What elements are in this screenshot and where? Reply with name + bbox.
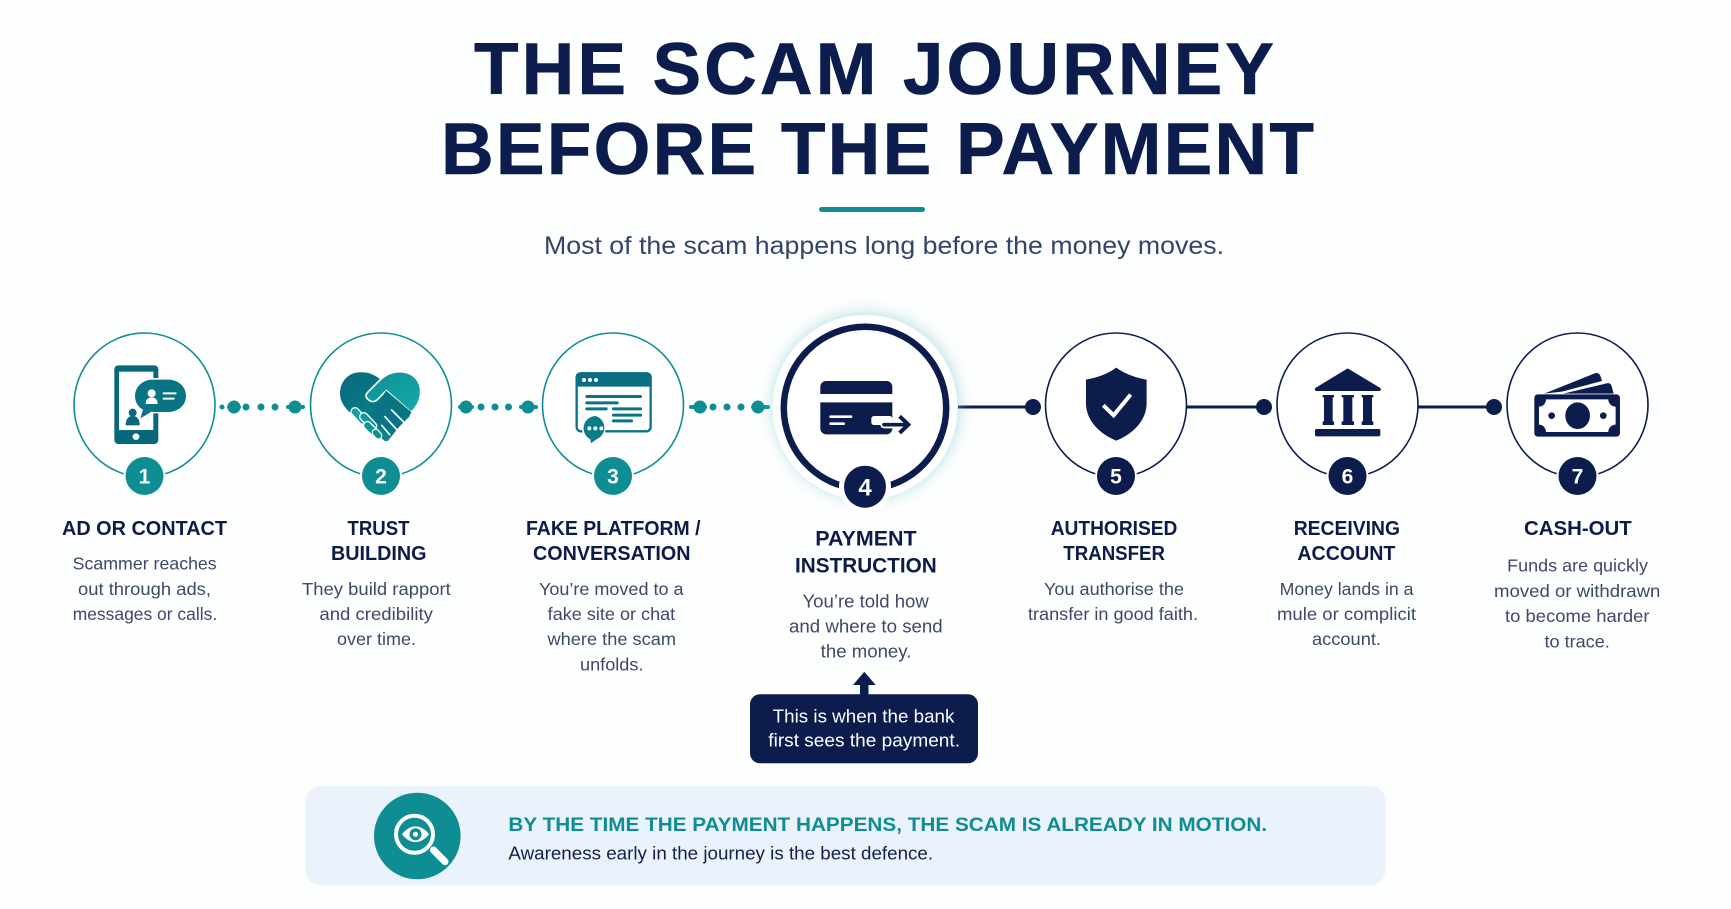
step 3 description: where the scam bbox=[546, 629, 676, 649]
connector: step 2 to 3 bbox=[458, 400, 538, 414]
icon: shield with check bbox=[1086, 368, 1147, 441]
step 2 circle bbox=[310, 333, 452, 477]
step 1 description: messages or calls. bbox=[73, 604, 217, 624]
step 3 description: unfolds. bbox=[580, 654, 644, 674]
step 5 heading: AUTHORISED bbox=[1051, 517, 1177, 540]
step 2 description: over time. bbox=[337, 629, 416, 649]
step 1: ad or contact bbox=[62, 333, 227, 624]
step 2: trust building bbox=[302, 333, 452, 649]
step 7 description: to trace. bbox=[1544, 632, 1610, 652]
badge 5: 5 bbox=[1110, 466, 1122, 488]
banner background bbox=[306, 786, 1386, 885]
step 6: receiving account bbox=[1277, 333, 1418, 649]
step 5 description bbox=[1028, 579, 1198, 624]
step 6 heading: ACCOUNT bbox=[1297, 542, 1396, 565]
step 6 description: mule or complicit bbox=[1277, 604, 1416, 624]
banner subtext: Awareness early in the journey is the best defence. bbox=[508, 843, 933, 863]
step 2 description: and credibility bbox=[319, 604, 433, 624]
step 4 heading bbox=[795, 527, 937, 577]
connector: step 3 to 4 bbox=[689, 400, 770, 414]
badge 3: 3 bbox=[607, 466, 619, 488]
step 4 glow halo bbox=[772, 312, 960, 500]
subtitle: Most of the scam happens long before the money moves. bbox=[544, 232, 1224, 260]
step 7 description bbox=[1494, 556, 1660, 652]
badge 4: 4 bbox=[858, 474, 872, 502]
step 4 white halo bbox=[772, 315, 958, 500]
callout: bank first sees payment bbox=[750, 694, 978, 763]
step 5 description: You authorise the bbox=[1044, 579, 1184, 599]
step 7 description: moved or withdrawn bbox=[1494, 581, 1660, 601]
title bbox=[441, 29, 1314, 190]
connector: step 1 to 2 bbox=[220, 400, 305, 414]
step 4 description bbox=[789, 591, 943, 662]
step 4 description: and where to send bbox=[789, 617, 943, 637]
step 4 heading: PAYMENT bbox=[815, 527, 917, 551]
panel: bottom takeaway banner bbox=[306, 786, 1386, 885]
step 3 description: You’re moved to a bbox=[539, 579, 684, 599]
connector: step 5 to 6 bbox=[1187, 399, 1272, 415]
step 7 description: to become harder bbox=[1505, 606, 1650, 626]
step 2 heading bbox=[331, 517, 426, 565]
step 6 description bbox=[1277, 579, 1416, 649]
icon: card with arrow bbox=[820, 381, 908, 434]
step 7 heading: CASH-OUT bbox=[1524, 517, 1632, 540]
step 7 description: Funds are quickly bbox=[1507, 556, 1648, 576]
badge 2 bbox=[360, 455, 402, 497]
connector: step 6 to 7 bbox=[1418, 399, 1502, 415]
icon: bank building bbox=[1315, 368, 1381, 436]
step 4 description: the money. bbox=[821, 642, 911, 662]
step 2 heading: BUILDING bbox=[331, 542, 426, 565]
icon: banknotes bbox=[1534, 373, 1620, 437]
step 3 circle bbox=[542, 333, 684, 477]
step 2 description bbox=[302, 579, 451, 649]
icon: magnifier with eye bbox=[374, 793, 461, 879]
step 5 heading: TRANSFER bbox=[1063, 542, 1165, 565]
badge 7 bbox=[1556, 455, 1598, 497]
step 3: fake platform bbox=[526, 333, 701, 674]
step 1 circle bbox=[74, 333, 215, 477]
badge 4 bbox=[839, 461, 891, 513]
step 3 heading: CONVERSATION bbox=[533, 542, 690, 565]
step 7: cash-out bbox=[1494, 333, 1660, 652]
callout: bank first sees payment: This is when the bank bbox=[773, 706, 955, 727]
badge 3 bbox=[592, 455, 634, 497]
step 3 description bbox=[539, 579, 684, 674]
badge 6 bbox=[1326, 455, 1368, 497]
step 6 description: Money lands in a bbox=[1280, 579, 1414, 599]
icon: browser window with chat bbox=[576, 372, 652, 446]
step 1 description: Scammer reaches bbox=[73, 554, 217, 574]
step 5: authorised transfer bbox=[1028, 333, 1198, 624]
title: THE SCAM JOURNEY bbox=[474, 29, 1274, 110]
step 7 circle bbox=[1507, 333, 1648, 477]
step 3 heading: FAKE PLATFORM / bbox=[526, 517, 701, 540]
badge 5 bbox=[1095, 455, 1137, 497]
step 5 description: transfer in good faith. bbox=[1028, 604, 1198, 624]
step 4 heading: INSTRUCTION bbox=[795, 553, 937, 577]
icon: heart handshake bbox=[340, 371, 421, 441]
step 6 description: account. bbox=[1312, 629, 1381, 649]
step 4 description: You’re told how bbox=[802, 591, 930, 611]
step 6 heading: RECEIVING bbox=[1294, 517, 1400, 540]
step 1 description: out through ads, bbox=[78, 579, 211, 599]
icon: phone with chat bubble bbox=[114, 365, 188, 444]
step 3 heading bbox=[526, 517, 701, 565]
title accent rule bbox=[819, 207, 925, 212]
step 1 heading: AD OR CONTACT bbox=[62, 517, 227, 540]
callout: bank first sees payment: first sees the payment. bbox=[768, 730, 960, 751]
step 4 ring bbox=[784, 327, 946, 489]
connector: step 4 to 5 bbox=[958, 399, 1041, 415]
step 6 circle bbox=[1277, 333, 1418, 477]
badge 7: 7 bbox=[1572, 466, 1583, 488]
step 2 heading: TRUST bbox=[348, 517, 410, 540]
step 3 description: fake site or chat bbox=[548, 604, 675, 624]
step 4: payment instruction (highlighted) bbox=[750, 312, 978, 763]
step 5 heading bbox=[1051, 517, 1177, 565]
badge 1 bbox=[124, 455, 166, 497]
step 1 description bbox=[73, 554, 217, 624]
badge 2: 2 bbox=[375, 466, 387, 488]
step 5 circle bbox=[1046, 333, 1186, 477]
title: BEFORE THE PAYMENT bbox=[441, 109, 1314, 190]
banner headline: BY THE TIME THE PAYMENT HAPPENS, THE SCAM IS ALREADY IN MOTION. bbox=[508, 815, 1267, 836]
badge 1: 1 bbox=[139, 466, 151, 488]
arrow up to step 4 bbox=[853, 672, 876, 696]
step 6 heading bbox=[1294, 517, 1400, 565]
badge 6: 6 bbox=[1342, 466, 1353, 488]
step 2 description: They build rapport bbox=[302, 579, 451, 599]
